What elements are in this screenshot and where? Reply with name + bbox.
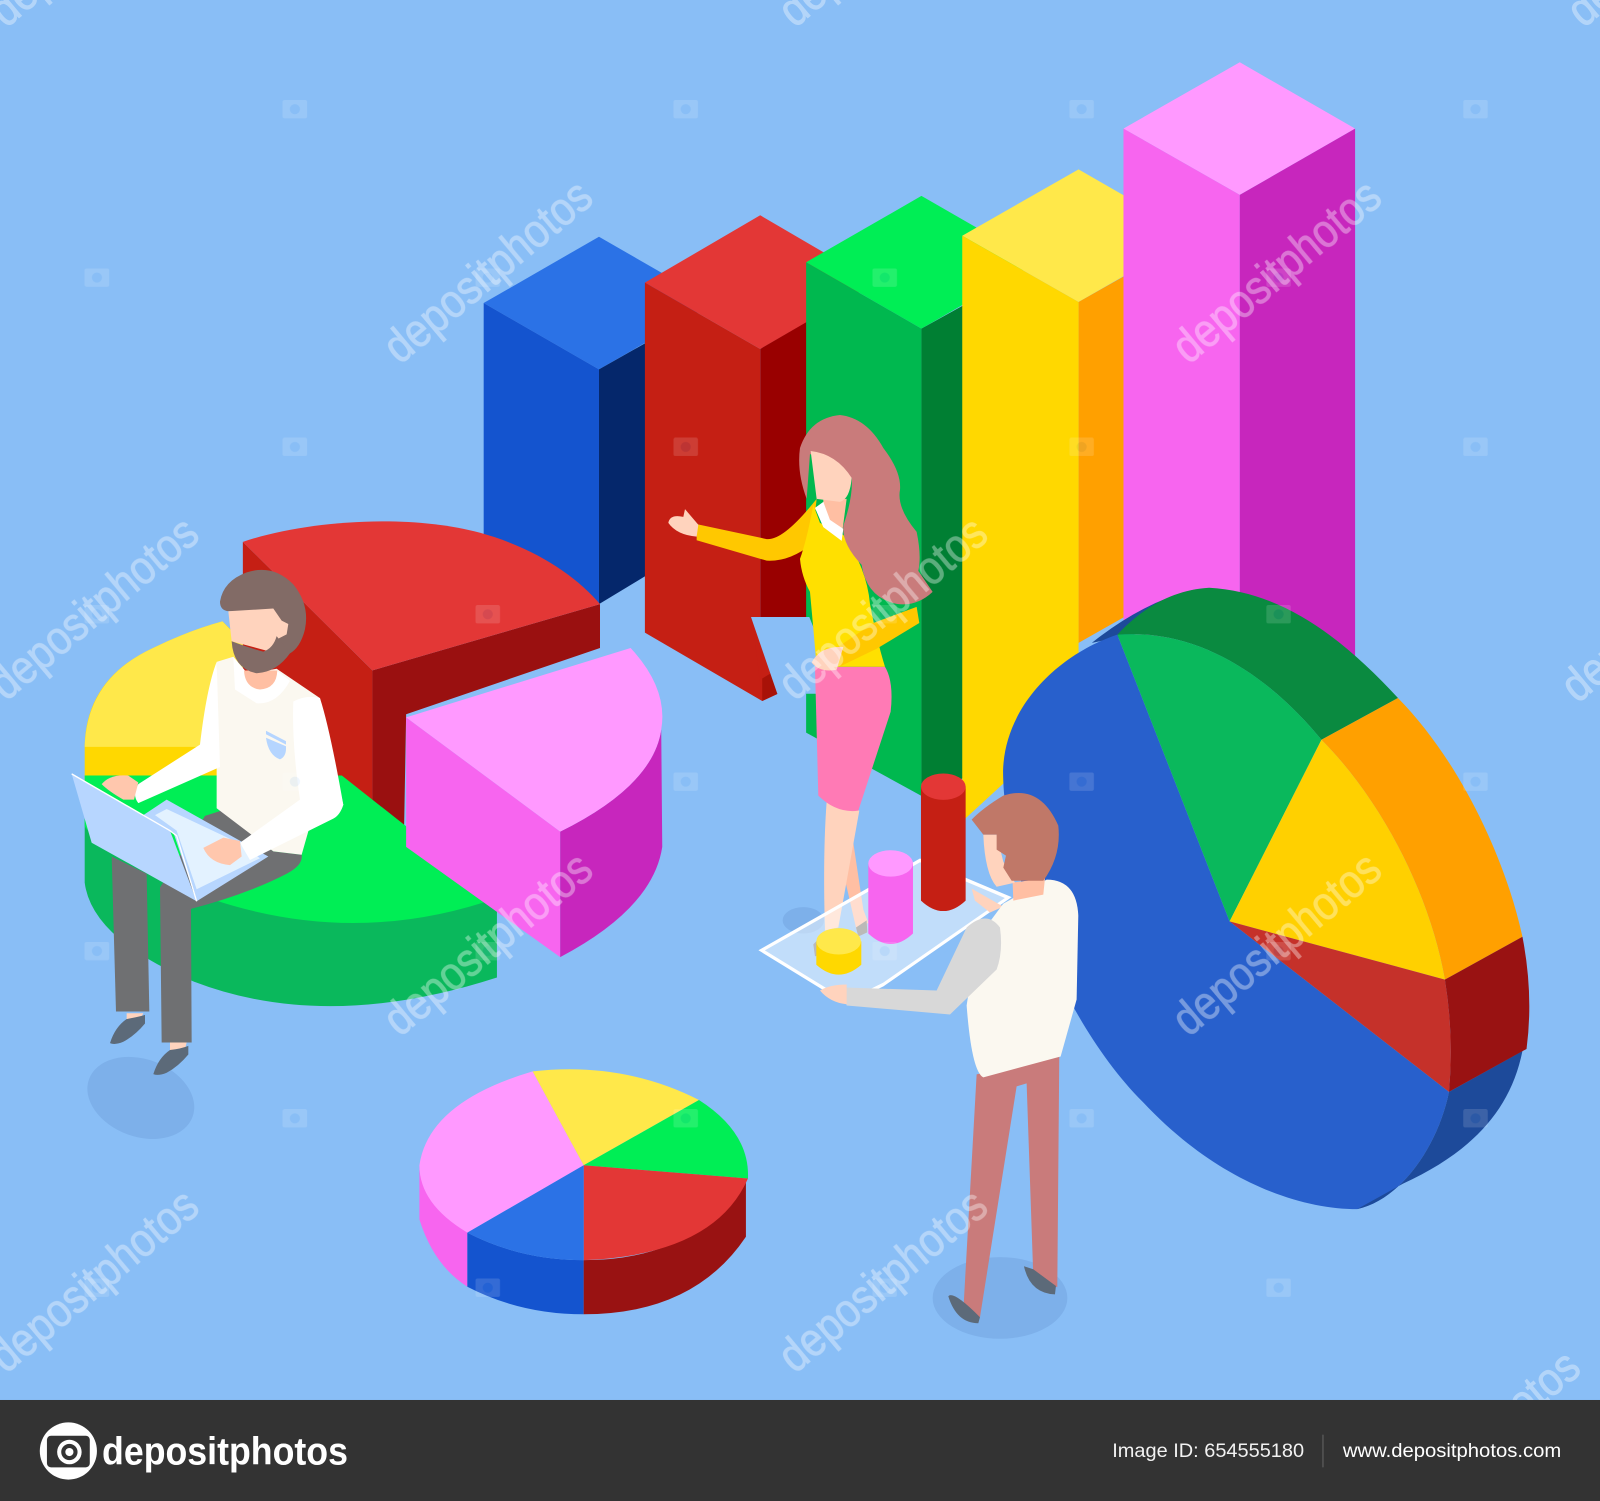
watermark: diagonal text: depositphotos bbox=[373, 842, 602, 1045]
tablet bbox=[751, 617, 840, 694]
hand bbox=[668, 509, 698, 537]
shoes bbox=[813, 920, 867, 956]
torso bbox=[800, 505, 885, 667]
tray bbox=[762, 860, 1008, 1002]
tray gap bbox=[883, 940, 967, 990]
skirt bbox=[815, 667, 892, 811]
face bbox=[811, 451, 852, 502]
cylinder: yellow bbox=[816, 928, 861, 975]
figure: seated man with laptop bbox=[72, 570, 343, 1075]
face bbox=[228, 609, 288, 652]
watermark: diagonal text: depositphotos bbox=[768, 506, 997, 710]
far hand bbox=[972, 889, 1003, 913]
right hand bbox=[203, 838, 242, 865]
pants bbox=[112, 810, 302, 1042]
right sleeve bbox=[813, 607, 919, 666]
beard bbox=[232, 636, 290, 673]
left sleeve bbox=[697, 499, 817, 561]
logo wordmark: depositphotos bbox=[102, 1430, 348, 1473]
shirt bbox=[967, 880, 1078, 1077]
shadow: standing man bbox=[933, 1257, 1067, 1339]
big tilted pie chart bbox=[1003, 588, 1529, 1209]
bar: pink bbox=[1123, 62, 1355, 673]
collar bbox=[233, 657, 290, 703]
bar: blue bbox=[484, 237, 714, 604]
watermark: camera icons bbox=[85, 100, 1488, 1297]
exploded pie chart bbox=[85, 521, 662, 1006]
cylinder: red bbox=[921, 773, 966, 911]
back leg bbox=[845, 832, 868, 931]
neck bbox=[1013, 878, 1045, 901]
bar chart bbox=[484, 62, 1355, 821]
bar: green bbox=[806, 196, 1037, 796]
figure: woman presenting bbox=[668, 415, 933, 956]
floor shadow bbox=[783, 907, 824, 934]
ankles bbox=[127, 1013, 187, 1053]
front leg bbox=[824, 802, 859, 931]
shadow: seated man bbox=[76, 1043, 206, 1153]
face bbox=[983, 835, 1015, 887]
hair bbox=[799, 415, 933, 604]
logo icon: camera bbox=[40, 1422, 97, 1480]
watermark: diagonal text: depositphotos bbox=[373, 169, 602, 373]
tray with cylinders and standing man bbox=[762, 773, 1078, 1323]
watermark: diagonal text: depositphotos bbox=[768, 1178, 997, 1382]
divider bbox=[1322, 1435, 1323, 1467]
sleeve bbox=[845, 919, 1001, 1014]
wedge: pink bbox=[406, 648, 662, 957]
watermark: diagonal text: depositphotos bbox=[1162, 842, 1391, 1045]
laptop base bbox=[143, 800, 268, 901]
wedge: green bbox=[85, 775, 497, 1006]
bar: red bbox=[645, 215, 876, 701]
collar bbox=[815, 502, 843, 541]
right hand bbox=[812, 647, 843, 670]
laptop keyboard bbox=[155, 809, 260, 889]
right arm bbox=[240, 697, 343, 860]
website: www.depositphotos.com bbox=[1342, 1440, 1561, 1462]
laptop screen bbox=[72, 774, 197, 901]
image id: Image ID: 654555180 bbox=[1112, 1440, 1304, 1462]
wedge: yellow bbox=[85, 621, 347, 786]
hair bbox=[972, 793, 1059, 881]
bar: yellow bbox=[962, 169, 1194, 821]
small pie chart bbox=[419, 1069, 748, 1314]
cylinder: pink bbox=[868, 850, 913, 944]
hair bbox=[220, 570, 306, 655]
watermark: diagonal text: depositphotos bbox=[1162, 169, 1391, 373]
trousers bbox=[963, 1055, 1059, 1317]
left arm bbox=[135, 662, 220, 803]
shirt body bbox=[217, 657, 343, 855]
pocket bbox=[266, 731, 286, 759]
shoes bbox=[110, 1015, 188, 1075]
wedge: red bbox=[243, 521, 600, 829]
neck bbox=[823, 499, 847, 529]
shoes bbox=[948, 1266, 1056, 1323]
footer bar bbox=[0, 1400, 1600, 1501]
left hand bbox=[102, 775, 138, 800]
neck bbox=[244, 671, 277, 689]
near hand bbox=[820, 984, 847, 1004]
